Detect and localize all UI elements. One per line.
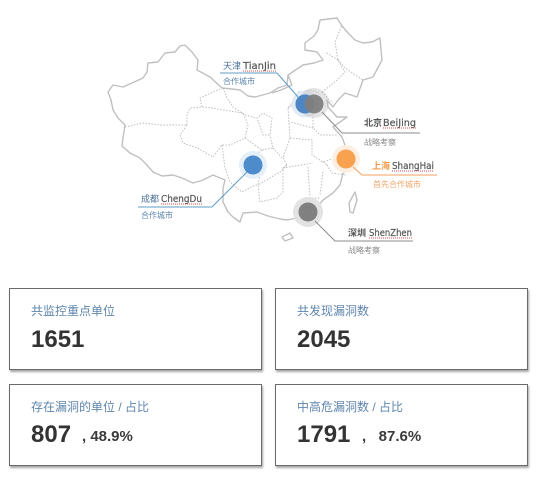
map: national outline: [108, 18, 382, 241]
heading: medium and high risk vulnerabilities: 中高危漏洞数 / 占比: [297, 400, 403, 414]
number: 1651: 1651: [31, 326, 84, 353]
panel: monitored units: [9, 288, 262, 370]
panel: units with vulnerabilities: [9, 384, 262, 466]
label: Beijing: BeiJing: [383, 118, 416, 129]
heading: monitored units: 共监控重点单位: [31, 304, 115, 318]
percentage: 48.9%: , 48.9%: [82, 428, 133, 445]
heading: units with vulnerabilities: 存在漏洞的单位 / 占比: [31, 400, 149, 414]
heading: vulnerabilities found: 共发现漏洞数: [297, 304, 369, 318]
map: province borders: [125, 25, 363, 202]
label: Shenzhen: 深圳: [348, 227, 366, 239]
marker: Beijing: [296, 88, 329, 118]
number: 2045: 2045: [297, 326, 350, 353]
marker: Tianjin: [292, 90, 318, 118]
label: Chengdu: ChengDu: [161, 194, 202, 205]
label: Tianjin: 合作城市: [223, 76, 255, 86]
label: Tianjin: [220, 61, 298, 97]
label: Tianjin: TianJin: [242, 61, 276, 72]
label: Beijing: 北京: [364, 117, 382, 129]
label: Shanghai: 上海: [372, 160, 390, 172]
marker: Shenzhen: [293, 197, 323, 227]
marker: Chengdu: [239, 151, 267, 179]
number: 1791: 1791: [297, 421, 350, 448]
label: Beijing: [322, 112, 420, 147]
label: Shenzhen: ShenZhen: [369, 228, 412, 239]
panel: vulnerabilities found: [275, 288, 528, 370]
label: Chengdu: [138, 172, 247, 220]
label: Tianjin: 天津: [223, 61, 241, 72]
marker: Shanghai: [332, 145, 360, 173]
label: Beijing: 战略考察: [364, 137, 396, 147]
label: Chengdu: 成都: [141, 193, 159, 205]
panel: medium and high risk vulnerabilities: [275, 384, 528, 466]
label: Shenzhen: 战略考察: [348, 245, 380, 255]
label: Shanghai: ShangHai: [392, 161, 434, 172]
number: 807: 807: [31, 421, 71, 448]
label: Shanghai: 首先合作城市: [373, 179, 421, 189]
label: Chengdu: 合作城市: [141, 210, 173, 220]
label: Shenzhen: [315, 221, 413, 255]
percentage: 87.6%: , 87.6%: [362, 428, 421, 445]
label: Shanghai: [353, 160, 437, 189]
map of China with city markers: [107, 17, 437, 255]
